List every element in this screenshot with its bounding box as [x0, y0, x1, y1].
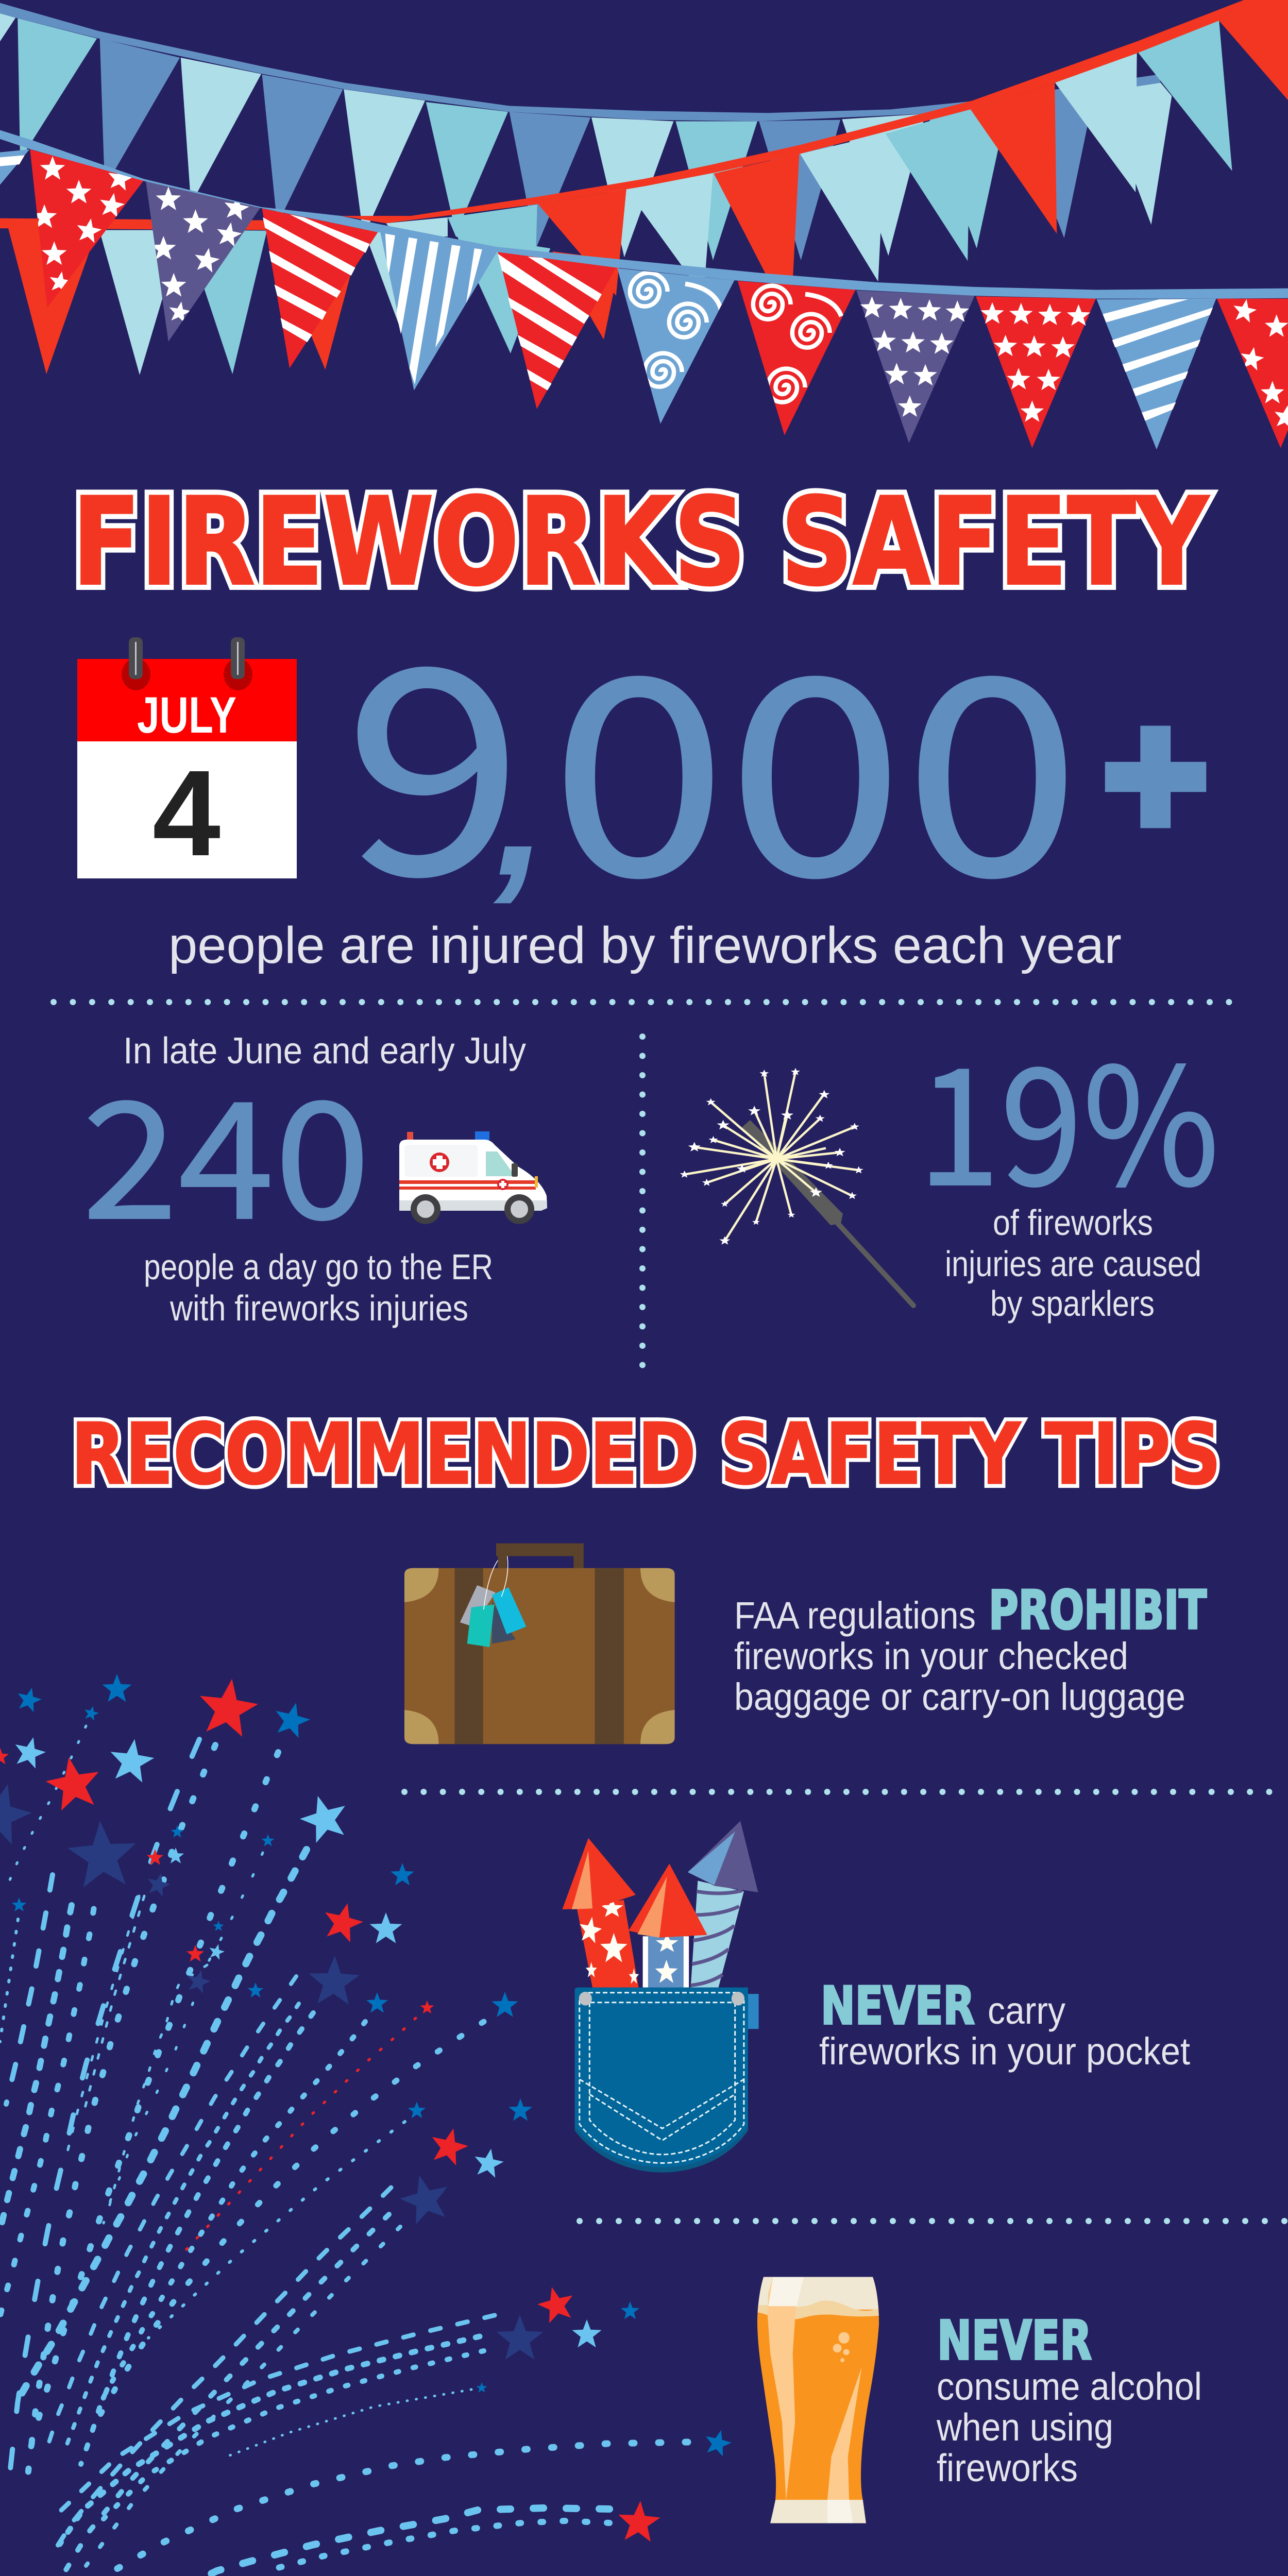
flag: red with star rows — [976, 296, 1096, 448]
flag: blue with curved stripes — [1097, 299, 1216, 449]
rocket: blue with stars — [629, 1863, 707, 1988]
tip text: never consume alcohol: consume alcohol — [937, 2365, 1202, 2408]
icon: July 4 calendar: JULY — [137, 686, 236, 743]
vertical dotted divider — [639, 1037, 646, 1365]
pocket — [575, 1988, 759, 2173]
bunting: back row on blue string — [0, 3, 1172, 260]
text: people a day — [144, 1247, 493, 1328]
red stars — [0, 1675, 662, 2543]
icon: fireworks in jeans pocket — [562, 1821, 759, 2173]
bunting: front row on light blue string — [0, 130, 1288, 449]
rocket: red with stars — [562, 1838, 639, 1988]
flag: red with stars at right edge — [1217, 297, 1288, 448]
tip text: never carry: NEVER — [821, 1975, 975, 2036]
icon: beer glass — [757, 2277, 879, 2523]
text: in late June: In late June and early July — [123, 1030, 526, 1072]
tip text: never carry: carry — [988, 1989, 1065, 2032]
statistic: 9,000+: 000 — [550, 558, 1080, 954]
tip text: FAA prohibit: PROHIBIT — [989, 1580, 1207, 1641]
dotted divider — [54, 999, 1234, 1005]
tip text: never consume alcohol: NEVER — [937, 2309, 1092, 2372]
tip text: FAA prohibit: FAA regulations — [734, 1594, 976, 1637]
dotted divider — [404, 1789, 1288, 1795]
tip text: never carry — [819, 1975, 1190, 2073]
statistic: 240: 240 — [82, 1030, 370, 1265]
dotted divider — [580, 2218, 1288, 2224]
tip text: FAA prohibit: fireworks in your checked — [734, 1635, 1128, 1677]
rocket: striped light blue — [688, 1821, 758, 1988]
tip text: never consume alcohol: fireworks — [937, 2446, 1078, 2489]
statistic: 9,000+: , — [493, 707, 547, 914]
flag: purple with star rows — [856, 291, 975, 443]
text: people a day: with fireworks injuries — [170, 1288, 468, 1328]
icon: ambulance — [399, 1131, 547, 1224]
text: of fireworks injuries: injuries are caused — [945, 1244, 1201, 1284]
icon: sparkler — [680, 1068, 913, 1306]
statistic: 9,000+: + — [1103, 673, 1209, 876]
icon: suitcase — [404, 1544, 675, 1744]
text: of fireworks injuries: of fireworks — [993, 1202, 1153, 1243]
statistic: 9,000+ — [344, 544, 1209, 956]
swirl patterns on flags — [630, 273, 841, 402]
light blue stars — [11, 1734, 602, 2347]
flag: red with white stripes — [262, 209, 378, 368]
tip text: FAA prohibit — [734, 1580, 1207, 1718]
tip text: never carry: fireworks in your pocket — [819, 2030, 1190, 2073]
fireworks burst: stars — [0, 1674, 734, 2543]
statistic: 9,000+: 9 — [344, 544, 523, 956]
flag: purple with stars — [146, 181, 261, 342]
text: of fireworks injuries: by sparklers — [990, 1283, 1155, 1324]
tip text: FAA prohibit: baggage or carry-on luggage — [734, 1675, 1185, 1718]
blue stars — [12, 1674, 734, 2458]
text: of fireworks injuries — [945, 1202, 1201, 1324]
icon: July 4 calendar: 4 — [152, 745, 221, 882]
navy stars — [0, 1777, 544, 2360]
text: people a day: people a day go to the ER — [144, 1247, 493, 1287]
icon: July 4 calendar — [77, 637, 297, 882]
caption: people are injured: people are injured by fireworks each year — [168, 917, 1122, 974]
fireworks burst: dotted trails — [0, 1726, 688, 2576]
tip text: never consume alcohol: when using — [936, 2405, 1113, 2449]
flag: red with stripes — [498, 252, 616, 409]
flag: blue with vertical stripes — [379, 225, 497, 391]
bunting: middle row on red string — [0, 0, 1288, 375]
statistic: 19%: 19% — [918, 997, 1219, 1232]
tip text: never consume alcohol — [936, 2309, 1202, 2489]
flag: red with stars — [30, 149, 144, 308]
